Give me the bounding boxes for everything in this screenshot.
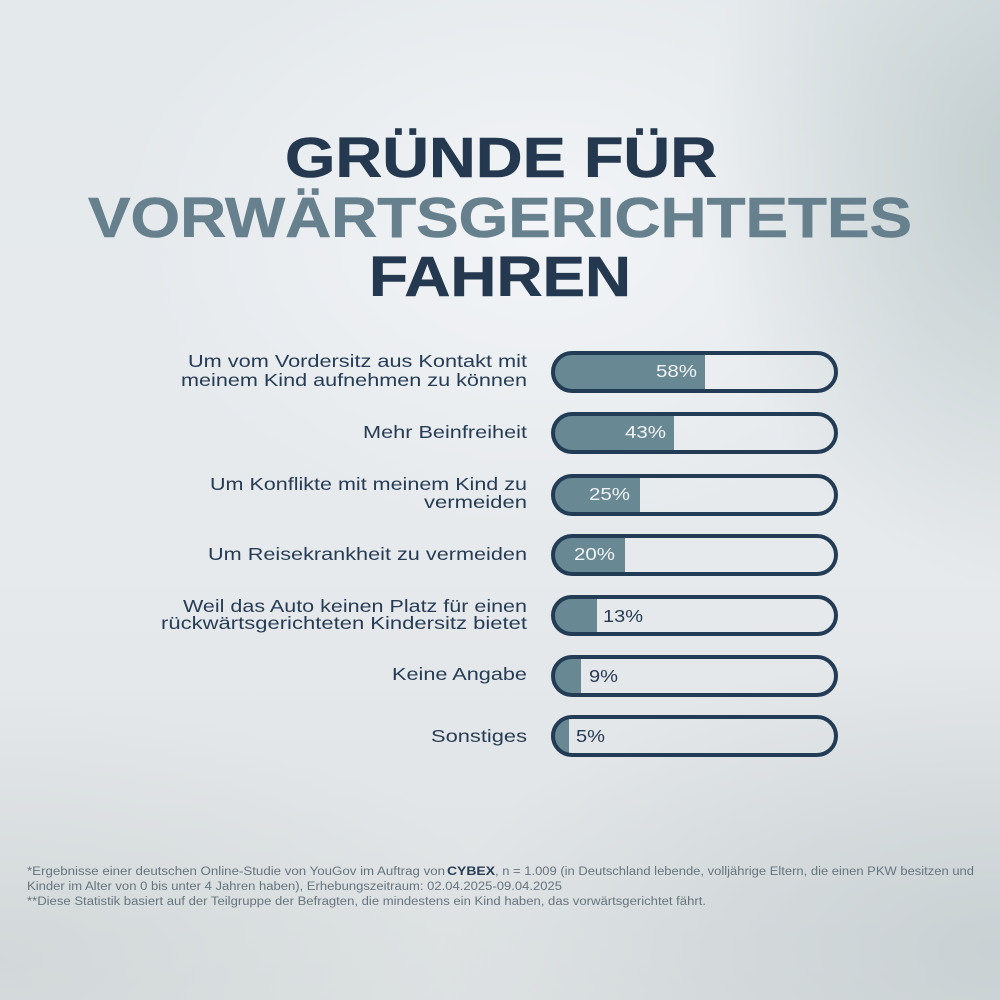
footnote: CYBEX — [447, 866, 495, 878]
footnote — [27, 866, 974, 908]
row: Beinfreiheit 43%: 43% — [625, 422, 666, 442]
footnote: , n = 1.009 (in Deutschland lebende, volljährige Eltern, die einen PKW besitzen und — [495, 866, 974, 878]
row: Konflikte 25%: 25% — [589, 484, 630, 504]
row: Platz 13%: rückwärtsgerichteten Kindersitz bietet — [161, 613, 527, 633]
row: Platz 13%: Weil das Auto keinen Platz für einen — [183, 596, 527, 616]
row: Platz 13% — [161, 596, 836, 634]
title: GRÜNDE FÜR — [285, 126, 717, 190]
row: Reisekrankheit 20% — [208, 536, 836, 574]
row: Reisekrankheit 20%: Um Reisekrankheit zu vermeiden — [208, 544, 527, 564]
title: FAHREN — [369, 245, 631, 309]
row: Platz 13%: 13% — [603, 606, 643, 626]
row: Keine Angabe 9% — [392, 657, 836, 695]
title: VORWÄRTSGERICHTETES — [88, 186, 912, 250]
row: Sonstiges 5% — [431, 717, 836, 755]
row: Beinfreiheit 43% — [363, 414, 836, 452]
row: Keine Angabe 9%: 9% — [589, 666, 618, 686]
row: Kontakt 58%: Um vom Vordersitz aus Kontakt mit — [188, 351, 527, 371]
title — [88, 126, 912, 309]
footnote: *Ergebnisse einer deutschen Online-Studie von YouGov im Auftrag von — [27, 866, 445, 878]
row: Kontakt 58%: 58% — [656, 361, 697, 381]
row: Kontakt 58% — [181, 351, 836, 391]
row: Konflikte 25%: vermeiden — [424, 492, 527, 512]
row: Reisekrankheit 20%: 20% — [574, 544, 615, 564]
row: Kontakt 58%: meinem Kind aufnehmen zu können — [181, 370, 527, 390]
footnote: **Diese Statistik basiert auf der Teilgruppe der Befragten, die mindestens ein Kind haben, das vorwärtsgerichtet fährt. — [27, 896, 706, 908]
row: Konflikte 25% — [210, 474, 836, 514]
row: Konflikte 25%: Um Konflikte mit meinem Kind zu — [210, 474, 527, 494]
row: Sonstiges 5%: 5% — [576, 726, 605, 746]
footnote: Kinder im Alter von 0 bis unter 4 Jahren haben), Erhebungszeitraum: 02.04.2025-09.04.2025 — [27, 881, 562, 893]
row: Beinfreiheit 43%: Mehr Beinfreiheit — [363, 422, 527, 442]
row: Sonstiges 5%: Sonstiges — [431, 726, 527, 746]
row: Keine Angabe 9%: Keine Angabe — [392, 664, 527, 684]
